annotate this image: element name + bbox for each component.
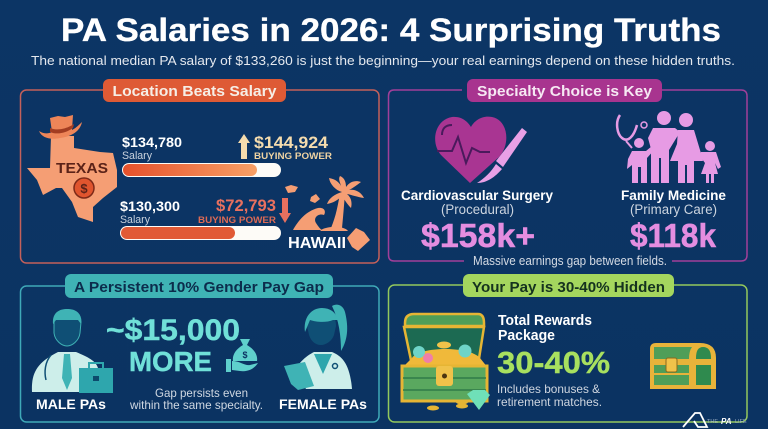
family medicine label: (Primary Care) xyxy=(630,202,717,217)
icon: heart and scalpel xyxy=(435,117,527,183)
icon: texas map with cowboy hat: $ xyxy=(80,181,88,196)
heading: gender pay gap: A Persistent 10% Gender Pay Gap xyxy=(74,279,324,296)
figure: 15000 more: MORE xyxy=(129,346,212,377)
hawaii salary: Salary xyxy=(120,214,150,226)
note: gap persists: Gap persists even xyxy=(155,386,248,400)
heading: location beats salary: Location Beats Salary xyxy=(112,84,276,100)
icon: money bag in hand: $ xyxy=(242,350,248,360)
cardiovascular figure: $158k+ xyxy=(421,217,535,254)
panel: hidden pay xyxy=(388,274,747,427)
heading: gender pay gap xyxy=(65,274,333,298)
note: includes bonuses: retirement matches. xyxy=(497,395,602,409)
logo: the PA life xyxy=(683,413,747,427)
label: male PAs: MALE PAs xyxy=(36,396,106,412)
icon: male PA xyxy=(32,309,113,393)
texas buying power: $144,924 xyxy=(254,133,329,152)
label: female PAs: FEMALE PAs xyxy=(279,396,367,412)
texas salary: Salary xyxy=(122,150,152,162)
cardiovascular surgery label xyxy=(401,187,553,217)
family medicine label xyxy=(621,187,726,217)
total rewards label: Package xyxy=(498,327,555,344)
family medicine figure: $118k xyxy=(630,217,717,254)
note: earnings gap: Massive earnings gap between fields. xyxy=(473,254,667,268)
note: includes bonuses xyxy=(497,382,602,409)
note: includes bonuses: Includes bonuses & xyxy=(497,382,600,396)
total rewards label xyxy=(498,312,592,344)
hawaii label: HAWAII xyxy=(288,235,346,252)
heading: specialty choice: Specialty Choice is Key xyxy=(477,84,652,100)
texas buying power xyxy=(238,133,332,162)
texas salary: $134,780 xyxy=(122,134,182,150)
cardiovascular surgery label: (Procedural) xyxy=(441,202,514,217)
panel: location beats salary xyxy=(20,79,379,263)
hawaii salary bar xyxy=(120,226,281,240)
heading: location beats salary xyxy=(103,79,286,102)
hawaii buying power xyxy=(198,196,291,226)
title: PA Salaries in 2026: 4 Surprising Truths xyxy=(61,12,721,48)
subtitle: The national median PA salary of $133,260 is just the beginning—your real earnings depend on these hidden truths. xyxy=(31,53,735,68)
texas salary xyxy=(122,134,182,162)
icon: texas map with cowboy hat xyxy=(27,115,117,222)
heading: hidden pay: Your Pay is 30-40% Hidden xyxy=(472,279,665,296)
family medicine label: Family Medicine xyxy=(621,187,726,203)
heading: specialty choice xyxy=(467,79,662,102)
hawaii salary: $130,300 xyxy=(120,198,180,214)
icon: family with stethoscope xyxy=(617,111,721,183)
icon: money bag in hand xyxy=(226,339,258,372)
hawaii buying power: $72,793 xyxy=(216,196,276,215)
note: gap persists xyxy=(129,386,263,412)
total rewards label: Total Rewards xyxy=(498,312,592,329)
texas salary bar xyxy=(122,163,281,177)
figure: 30-40%: 30-40% xyxy=(497,345,610,380)
texas buying power: BUYING POWER xyxy=(254,151,332,162)
icon: texas map with cowboy hat: TEXAS xyxy=(56,160,108,177)
cardiovascular surgery label: Cardiovascular Surgery xyxy=(401,187,553,203)
icon: hawaii islands, wave and palm xyxy=(285,176,370,251)
logo: the PA life: THE xyxy=(707,419,718,425)
panel: specialty choice xyxy=(388,79,747,268)
icon: open treasure chest xyxy=(402,314,490,410)
icon: closed treasure chest xyxy=(650,343,716,389)
note: gap persists: within the same specialty. xyxy=(129,398,263,412)
panel: gender pay gap xyxy=(20,274,379,422)
heading: hidden pay xyxy=(463,274,674,297)
logo: the PA life: LIFE xyxy=(735,419,747,425)
hawaii salary xyxy=(120,198,180,226)
figure: 15000 more: ~$15,000 xyxy=(106,314,240,347)
logo: the PA life: PA xyxy=(721,417,732,426)
figure: 15000 more xyxy=(106,314,240,377)
hawaii buying power: BUYING POWER xyxy=(198,215,276,226)
icon: female PA xyxy=(284,305,352,390)
